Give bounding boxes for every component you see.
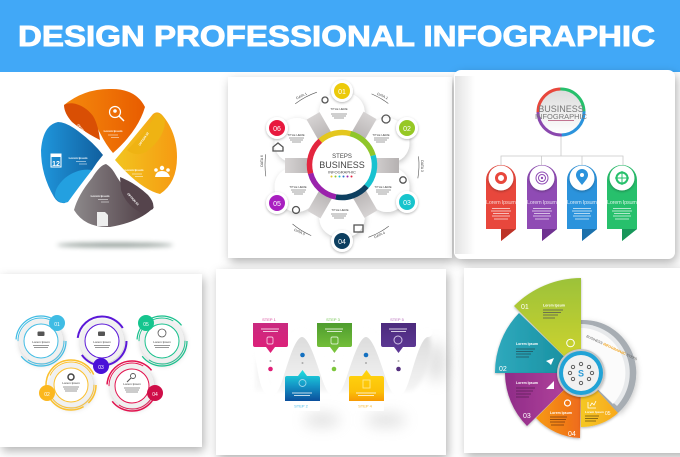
step titles: TITLE HERE — [289, 185, 307, 189]
sector 02 — [495, 313, 581, 373]
sector 01: Lorem Ipsum — [543, 304, 565, 308]
data labels — [260, 92, 424, 239]
ring centre text: BUSINESS — [319, 160, 365, 170]
circle: step 05 green — [137, 315, 187, 366]
ring label: BUSINESS INFOGRAPHIC STEPS — [586, 334, 638, 362]
step 4 card — [349, 353, 384, 411]
circle: step 05 green: 05 — [143, 322, 149, 328]
step 2 card — [285, 353, 320, 411]
top circle — [535, 89, 588, 135]
step badges — [266, 80, 418, 252]
ring centre text: STEPS — [332, 154, 352, 160]
centre hub — [557, 349, 605, 397]
top circle: BUSINESS — [538, 104, 584, 114]
sector 02: Lorem Ipsum — [516, 342, 538, 346]
petal: yellow option: OPTION 02 — [138, 131, 150, 147]
circle: step 05 green: Lorem Ipsum — [153, 340, 171, 344]
step 4 card: STEP 4 — [358, 404, 373, 408]
sector 05: Lorem Ipsum — [585, 410, 604, 414]
step icons — [273, 97, 406, 232]
panel: radial sectors — [464, 268, 680, 453]
petal: blue option: Lorem Ipsum — [69, 156, 88, 160]
top circle: INFOGRAPHIC — [535, 112, 588, 121]
card: purple — [527, 165, 557, 241]
step 1 card: STEP 1 — [262, 317, 277, 322]
panel: steps business wheel — [228, 57, 452, 273]
step badges: 04 — [338, 239, 346, 246]
card: red: Lorem Ipsum — [486, 200, 516, 206]
grey outer ring — [581, 320, 636, 413]
data labels: DATA 5 — [293, 228, 306, 236]
colour dots — [330, 176, 352, 178]
step badges: 02 — [403, 126, 411, 133]
circle: step 02 orange: Lorem Ipsum — [62, 381, 80, 385]
step titles: TITLE HERE — [331, 208, 349, 212]
card: green: Lorem Ipsum — [607, 200, 637, 206]
step 3 card — [317, 313, 352, 371]
step text lines — [289, 114, 391, 218]
step titles: TITLE HERE — [287, 133, 305, 137]
card: blue: Lorem Ipsum — [567, 200, 597, 206]
card: green — [607, 165, 637, 241]
petal: grey option: OPTION 03 — [126, 192, 140, 207]
connector lines — [501, 136, 623, 165]
circle: step 04 red: 04 — [152, 392, 158, 398]
circle: step 02 orange: 02 — [44, 392, 50, 398]
circle: step 04 red: Lorem Ipsum — [123, 382, 141, 386]
step 2 card: STEP 2 — [294, 404, 309, 408]
step 3 card: STEP 3 — [326, 317, 341, 322]
data arcs — [234, 57, 450, 273]
card: red — [486, 165, 516, 241]
petal: grey option — [74, 164, 154, 227]
wave grey fill — [255, 332, 431, 391]
data labels: DATA 4 — [373, 231, 386, 239]
central ring — [296, 119, 388, 211]
ring centre text: INFOGRAPHIC — [328, 170, 356, 174]
petal: orange option: OPTION 01 — [76, 123, 90, 138]
step badges: 06 — [273, 126, 281, 133]
step titles: TITLE HERE — [330, 107, 348, 111]
data labels: DATA 3 — [420, 160, 424, 172]
step badges: 05 — [273, 201, 281, 208]
petal: yellow option — [115, 112, 177, 194]
petal: blue option: 12 — [52, 161, 60, 168]
step 5 card — [381, 313, 416, 371]
card: purple: Lorem Ipsum — [527, 200, 557, 206]
petal: grey option: Lorem Ipsum — [91, 194, 110, 198]
step 5 card: STEP 5 — [390, 317, 405, 322]
data labels: DATA 2 — [376, 92, 389, 100]
ring centre text — [319, 154, 365, 174]
step badges: 03 — [403, 200, 411, 207]
circle: step 02 orange — [39, 360, 96, 410]
step titles — [287, 107, 392, 212]
sector 04: Lorem Ipsum — [550, 411, 572, 415]
wave ribbon — [255, 332, 428, 391]
sector 04: 04 — [568, 431, 576, 438]
card: blue — [567, 165, 597, 241]
sector 02: 02 — [499, 366, 507, 373]
sector 01: 01 — [521, 304, 529, 311]
title banner — [0, 0, 680, 72]
panel: interlinked circles — [0, 274, 202, 447]
badge: step 03 — [93, 358, 109, 374]
sector 03 — [505, 373, 581, 426]
badge: step 03: 03 — [98, 365, 104, 371]
sector 03: 03 — [523, 413, 531, 420]
sector 03: Lorem Ipsum — [516, 381, 538, 385]
data labels: DATA 6 — [260, 155, 264, 167]
petal: orange option — [64, 89, 145, 153]
circle: step 03 purple — [78, 316, 126, 366]
petal: yellow option: Lorem Ipsum — [125, 168, 144, 172]
circle: step 01 blue: Lorem Ipsum — [32, 340, 50, 344]
step titles: TITLE HERE — [374, 185, 392, 189]
circle: step 03 purple: Lorem Ipsum — [93, 340, 111, 344]
step titles: TITLE HERE — [372, 133, 390, 137]
petal: orange option: Lorem Ipsum — [104, 129, 123, 133]
circle: step 04 red — [107, 361, 163, 411]
step badges: 01 — [338, 89, 346, 96]
data labels: DATA 1 — [295, 92, 308, 100]
centre hub: S — [578, 368, 584, 378]
circle: step 01 blue — [16, 315, 66, 366]
circle: step 01 blue: 01 — [54, 322, 60, 328]
panel: business org chart — [454, 70, 675, 259]
ground shadow — [57, 242, 173, 248]
panel: petal infographic — [41, 89, 177, 248]
sector 05 — [581, 373, 618, 427]
petal: blue option — [41, 122, 103, 203]
sector 05: 05 — [605, 411, 611, 417]
grey spokes — [285, 112, 399, 218]
white petals — [267, 92, 417, 238]
title: DESIGN PROFESSIONAL INFOGRAPHIC — [18, 21, 655, 53]
sector 01 — [514, 278, 581, 373]
wave shadow — [304, 342, 446, 427]
sector 04 — [536, 373, 581, 438]
panel: wave steps — [216, 269, 446, 455]
step 1 card — [253, 313, 288, 371]
